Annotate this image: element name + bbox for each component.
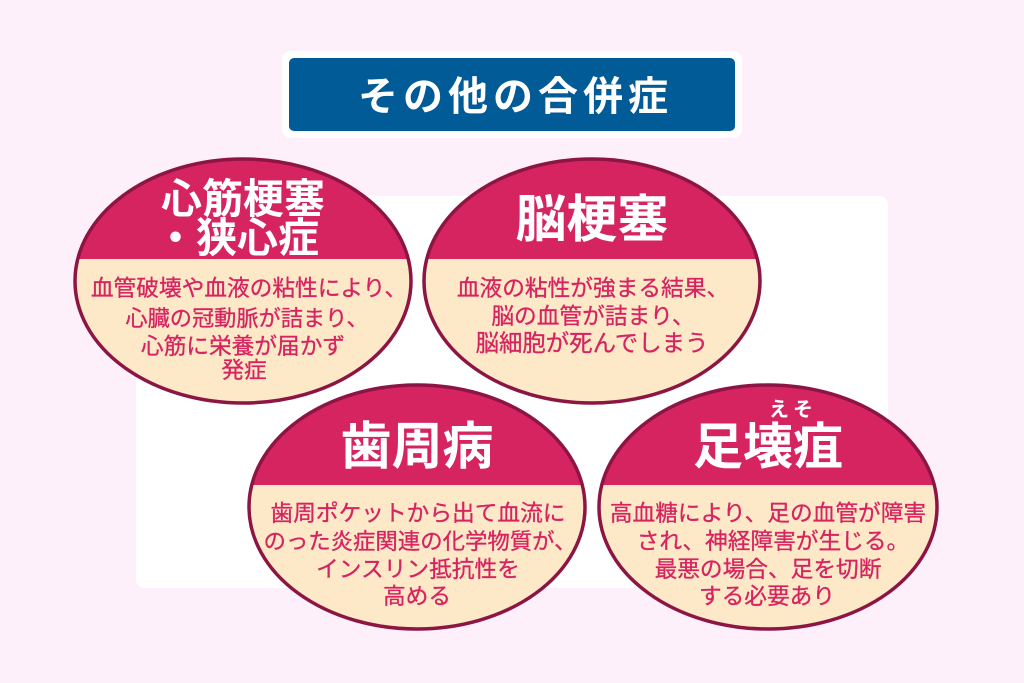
description: 高める	[383, 583, 451, 609]
description: インスリン抵抗性を	[316, 556, 520, 582]
description: 脳細胞が死んでしまう	[476, 330, 708, 356]
panel: myocardial infarction and angina	[70, 155, 420, 409]
heading: 足壊疽	[693, 419, 843, 475]
title: その他の合併症	[358, 75, 673, 119]
panel: periodontal disease	[245, 380, 595, 635]
description: 発症	[221, 357, 267, 383]
furigana: えそ	[769, 398, 817, 421]
description: 高血糖により、足の血管が障害	[610, 500, 926, 526]
heading: 心筋梗塞	[161, 176, 325, 222]
description: する必要あり	[699, 583, 835, 609]
description: 脳の血管が詰まり、	[491, 303, 695, 329]
description: 血液の粘性が強まる結果、	[457, 275, 729, 301]
heading: 歯周病	[340, 418, 494, 475]
heading	[155, 176, 325, 261]
description: 心筋に栄養が届かず	[141, 333, 345, 359]
description	[457, 275, 729, 356]
description	[610, 500, 926, 609]
background panel	[136, 196, 888, 588]
description: 血管破壊や血液の粘性により、	[91, 275, 407, 301]
panel: gangrene	[595, 380, 945, 635]
description	[263, 500, 577, 609]
description: のった炎症関連の化学物質が、	[263, 529, 577, 554]
heading: 脳梗塞	[515, 191, 669, 248]
description: され、神経障害が生じる。	[637, 528, 909, 554]
heading: ・狭心症	[155, 215, 319, 261]
description: 歯周ポケットから出て血流に	[271, 500, 565, 526]
title banner	[282, 51, 742, 138]
panel: cerebral infarction	[420, 155, 770, 409]
description: 最悪の場合、足を切断	[655, 556, 881, 582]
description	[91, 275, 407, 383]
description: 心臓の冠動脈が詰まり、	[125, 306, 369, 331]
